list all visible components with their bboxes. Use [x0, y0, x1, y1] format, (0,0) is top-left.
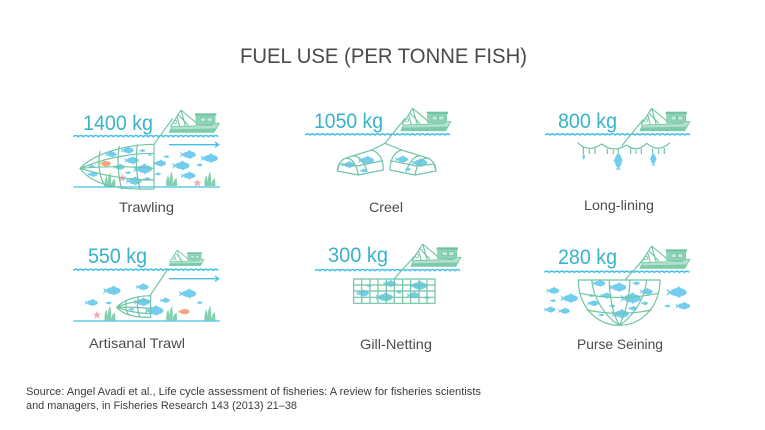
value: 300 kg: 300 kg: [328, 244, 388, 267]
value: 800 kg: 800 kg: [558, 110, 617, 133]
panel: artisanal trawl: [73, 245, 220, 351]
panel: trawling: [73, 110, 220, 215]
label: trawling: Trawling: [119, 199, 174, 215]
label: purse seining: Purse Seining: [577, 336, 663, 352]
panel: purse seining: [544, 246, 690, 352]
source note: and managers, in Fisheries Research 143 (2013) 21–38: [26, 400, 297, 412]
source note: Source: Angel Avadi et al., Life cycle assessment of fisheries: A review for fisheries scientists: [26, 386, 481, 398]
illustration: long line, hooks and boat: [545, 108, 690, 171]
illustration: small trawl, boat and fish: [73, 250, 220, 321]
value: 550 kg: 550 kg: [88, 245, 147, 268]
source note: [26, 386, 481, 412]
illustration: trawl net, boat and fish: [73, 110, 220, 190]
value: 1050 kg: 1050 kg: [314, 110, 383, 133]
label: artisanal trawl: Artisanal Trawl: [89, 335, 185, 351]
label: creel: Creel: [369, 199, 403, 215]
label: long-lining: Long-lining: [584, 197, 654, 213]
illustration: purse seine, boat and fish: [544, 246, 690, 325]
illustration: creel traps and boat: [305, 108, 451, 175]
title: FUEL USE (PER TONNE FISH): [240, 45, 527, 68]
value: 1400 kg: 1400 kg: [83, 112, 153, 135]
value: 280 kg: 280 kg: [558, 246, 617, 269]
panel: creel: [305, 108, 451, 215]
label: gill-netting: Gill-Netting: [360, 336, 432, 352]
panel: gill-netting: [315, 244, 461, 352]
illustration: gill net, boat and fish: [315, 244, 461, 303]
panel: long-lining: [545, 108, 690, 213]
